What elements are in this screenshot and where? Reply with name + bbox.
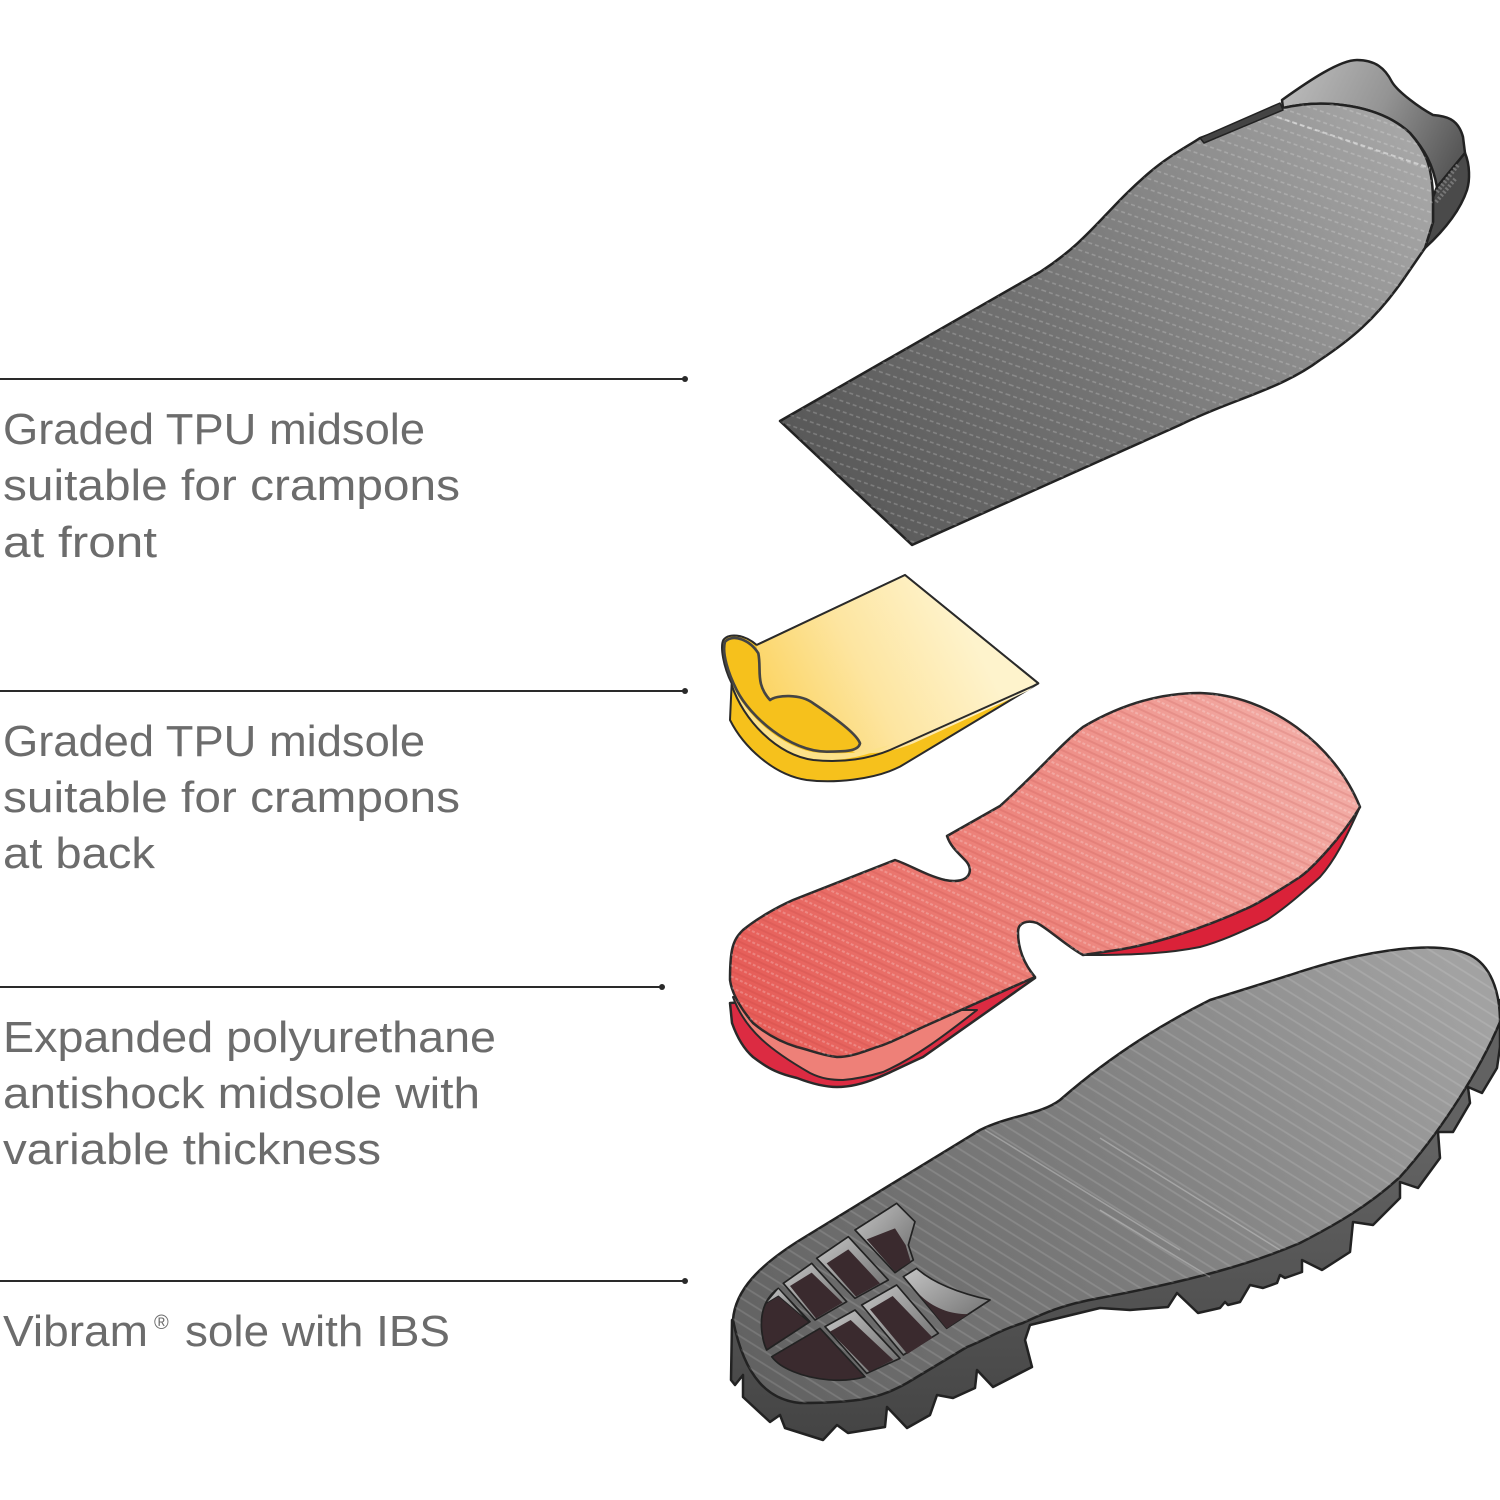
- layer: yellow heel midsole: [722, 575, 1038, 781]
- layer: Vibram outsole: [731, 948, 1500, 1440]
- label 3: expanded polyurethane midsole: antishock midsole with: [3, 1069, 480, 1118]
- label 4: Vibram sole with IBS: ®: [154, 1312, 169, 1334]
- label 1: graded TPU midsole at front: at front: [3, 518, 157, 567]
- IBS recess grid: [761, 1203, 990, 1380]
- label 3: expanded polyurethane midsole: [0, 984, 665, 1174]
- outsole tread lugs: [731, 1000, 1500, 1440]
- label 2: graded TPU midsole at back: suitable for crampons: [3, 773, 460, 822]
- label 4: Vibram sole with IBS: [0, 1278, 688, 1356]
- label 1: graded TPU midsole at front: Graded TPU midsole: [3, 405, 425, 454]
- label 4: Vibram sole with IBS: sole with IBS: [185, 1307, 450, 1356]
- label 1: graded TPU midsole at front: suitable for crampons: [3, 461, 460, 510]
- label 3: expanded polyurethane midsole: variable thickness: [3, 1125, 381, 1174]
- label 2: graded TPU midsole at back: Graded TPU midsole: [3, 717, 425, 766]
- label 3: expanded polyurethane midsole: Expanded polyurethane: [3, 1013, 496, 1062]
- label 1: graded TPU midsole at front: [0, 376, 688, 567]
- outsole top face: [733, 948, 1500, 1403]
- label 4: Vibram sole with IBS: Vibram: [3, 1307, 148, 1356]
- layer: red antishock midsole: [730, 693, 1360, 1087]
- layer: top carbon midsole with toe cap: [780, 60, 1469, 545]
- label 2: graded TPU midsole at back: [0, 688, 688, 878]
- label 2: graded TPU midsole at back: at back: [3, 829, 156, 878]
